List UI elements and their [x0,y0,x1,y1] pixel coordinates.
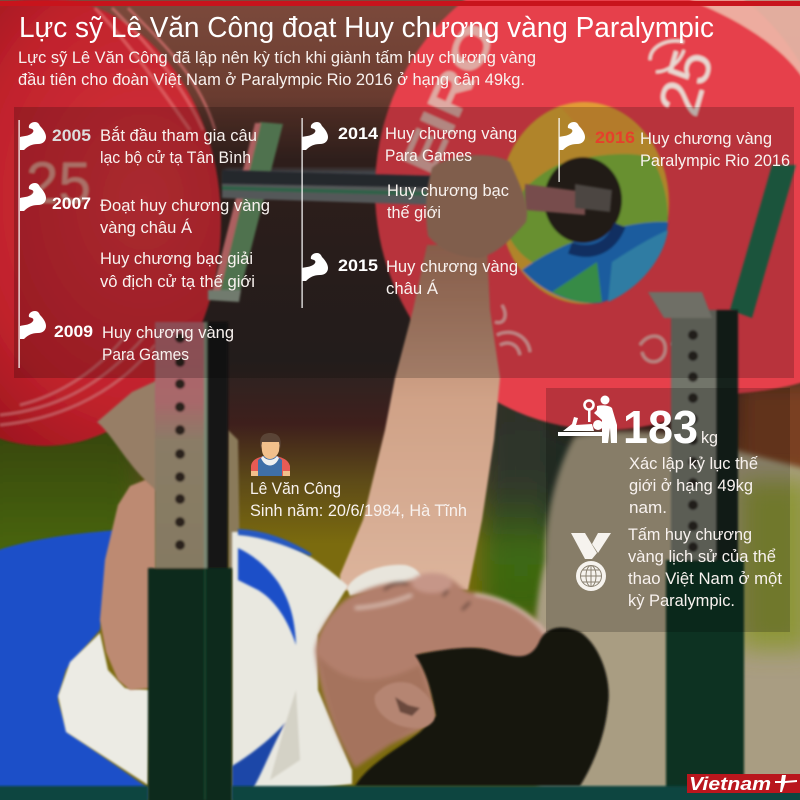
photo: right red weight plate: 25 [646,43,726,123]
icon: athlete portrait [251,433,290,476]
stat: 183 kg: kg [701,428,718,447]
photo: white collar [347,565,424,596]
photo: athlete's ear [375,682,434,728]
timeline column 3: 2016: 2016 [595,129,635,147]
timeline entry: 2014: thế giới [387,203,441,222]
photo: right rack post [648,292,744,800]
photo: left red weight plate [0,0,221,446]
timeline entry: 2009: Huy chương vàng [102,323,234,342]
timeline entry: 2005: lạc bộ cử tạ Tân Bình [100,148,251,167]
photo: left rack post [148,322,232,800]
timeline entry: 2015: Huy chương vàng [386,257,518,276]
timeline entry: 2007: vô địch cử tạ thế giới [100,272,255,291]
intro text: Lực sỹ Lê Văn Công đã lập nên kỳ tích khi giành tấm huy chương vàng [18,48,536,67]
intro text [18,48,536,89]
top red bar [0,1,800,6]
timeline entry: 2007: vàng châu Á [100,218,193,237]
icon: weightlifter with spotter [558,396,617,443]
photo: Rio logo disc [499,102,669,304]
timeline entry: 2005 [20,122,257,167]
timeline entry: 2009: 2009 [54,323,93,341]
photo: beige trousers behind the rack [533,432,800,800]
timeline column 2 [302,118,518,308]
timeline entry: 2007 [20,183,270,291]
medal description: thao Việt Nam ở một [628,569,782,588]
photo: green rack arms [208,122,796,318]
photo: white shirt, right [232,532,352,800]
timeline entry: 2014: Huy chương vàng [385,124,517,143]
medal description [628,525,782,610]
timeline entry: 2015: châu Á [386,279,439,298]
photo: bench edge [0,786,800,800]
intro text: đầu tiên cho đoàn Việt Nam ở Paralympic Rio 2016 ở hạng cân 49kg. [18,70,525,89]
title: Lực sỹ Lê Văn Công đoạt Huy chương vàng Paralympic [19,12,714,44]
timeline entry: 2007: Huy chương bạc giải [100,249,253,268]
medal description: Tấm huy chương [628,525,752,544]
timeline column 1 [18,120,270,368]
record description [629,454,759,517]
timeline entry: 2015: 2015 [338,257,378,275]
photo: barbell [222,170,612,215]
athlete details: Sinh năm: 20/6/1984, Hà Tĩnh [250,501,467,520]
timeline entry: 2014 [302,122,517,222]
timeline column 3: 2016: Paralympic Rio 2016 [640,151,790,170]
medal description: kỳ Paralympic. [628,591,735,610]
photo: raised arm and fist [340,155,527,590]
timeline entry: 2007: 2007 [52,195,91,213]
record description: giới ở hạng 49kg [629,476,753,495]
timeline entry: 2014: Para Games [385,146,472,165]
athlete details: Lê Văn Công [250,479,341,498]
photo: lower background colours [0,290,800,650]
medal description: vàng lịch sử của thể [628,547,776,566]
timeline entry: 2009 [20,311,234,364]
timeline entry: 2014: 2014 [338,125,379,143]
photo: left red weight plate: 25 [26,151,91,216]
stat: 183 kg: 183 [623,401,698,453]
timeline entry: 2005: Bắt đầu tham gia câu [100,126,257,145]
logo: Vietnam+: Vietnam [689,774,771,794]
photo: crowd strip [225,170,405,186]
icon: medal [571,533,611,591]
timeline entry: 2014: Huy chương bạc [387,181,509,200]
record description: nam. [629,498,667,517]
timeline entry: 2007: Đoạt huy chương vàng [100,196,270,215]
photo: right red weight plate: EIRO [391,14,507,182]
logo: Vietnam+ [687,774,800,794]
timeline entry: 2009: Para Games [102,345,189,364]
photo: athlete's hair [355,627,609,786]
athlete details [250,479,467,520]
timeline entry: 2005: 2005 [52,127,91,145]
photo: athlete's left arm [97,380,240,690]
timeline entry: 2015 [302,253,518,298]
photo: face and neck [315,573,548,768]
photo: athlete's blue vest, left [0,530,148,800]
panel: records overlay [546,388,790,632]
panel: timeline overlay [14,107,794,378]
photo: athlete's left sleeve [58,633,150,785]
timeline column 3: 2016 [558,118,790,182]
photo: right red weight plate [375,0,800,430]
record description: Xác lập kỷ lục thế [629,454,759,473]
photo: blue shirt stripes [232,529,312,800]
timeline column 3: 2016: Huy chương vàng [640,129,772,148]
